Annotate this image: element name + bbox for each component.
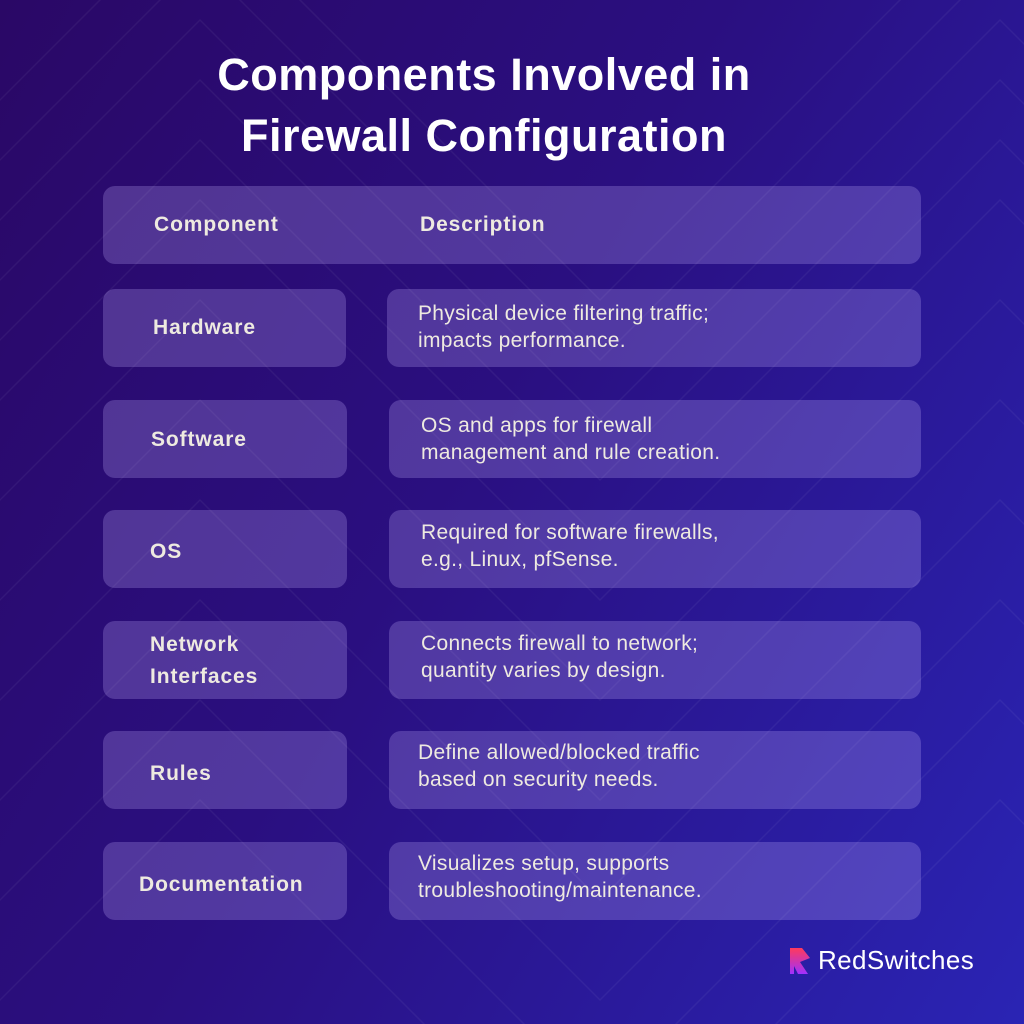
row: software: management and rule creation. — [421, 441, 720, 464]
row: documentation: Documentation — [139, 873, 304, 896]
row: OS: e.g., Linux, pfSense. — [421, 548, 619, 571]
row: network interfaces: quantity varies by design. — [421, 659, 666, 682]
title: Components Involved in — [217, 49, 751, 100]
header: component: Component — [154, 213, 279, 236]
row: network interfaces: Network — [150, 633, 239, 656]
row: rules: Define allowed/blocked traffic — [418, 741, 700, 764]
header: description: Description — [420, 213, 545, 236]
row: network interfaces: Connects firewall to network; — [421, 632, 698, 655]
title: Firewall Configuration — [241, 110, 727, 161]
row: documentation: troubleshooting/maintenance. — [418, 879, 702, 902]
row: hardware — [103, 289, 921, 367]
row: network interfaces: Interfaces — [150, 665, 258, 688]
row: software: OS and apps for firewall — [421, 414, 652, 437]
logo: RedSwitches — [818, 945, 974, 975]
row: OS — [103, 510, 921, 588]
row: hardware: impacts performance. — [418, 329, 626, 352]
row: hardware: Physical device filtering traffic; — [418, 302, 709, 325]
row: OS: OS — [150, 540, 182, 563]
row: network interfaces — [103, 621, 921, 699]
row: rules: based on security needs. — [418, 768, 659, 791]
row: OS: Required for software firewalls, — [421, 521, 719, 544]
row: software: Software — [151, 428, 247, 451]
row: documentation — [103, 842, 921, 920]
title — [217, 49, 751, 161]
row: software — [103, 400, 921, 478]
header row — [103, 186, 921, 264]
row: rules — [103, 731, 921, 809]
row: hardware: Hardware — [153, 316, 256, 339]
row: documentation: Visualizes setup, supports — [418, 852, 669, 875]
row: rules: Rules — [150, 762, 212, 785]
